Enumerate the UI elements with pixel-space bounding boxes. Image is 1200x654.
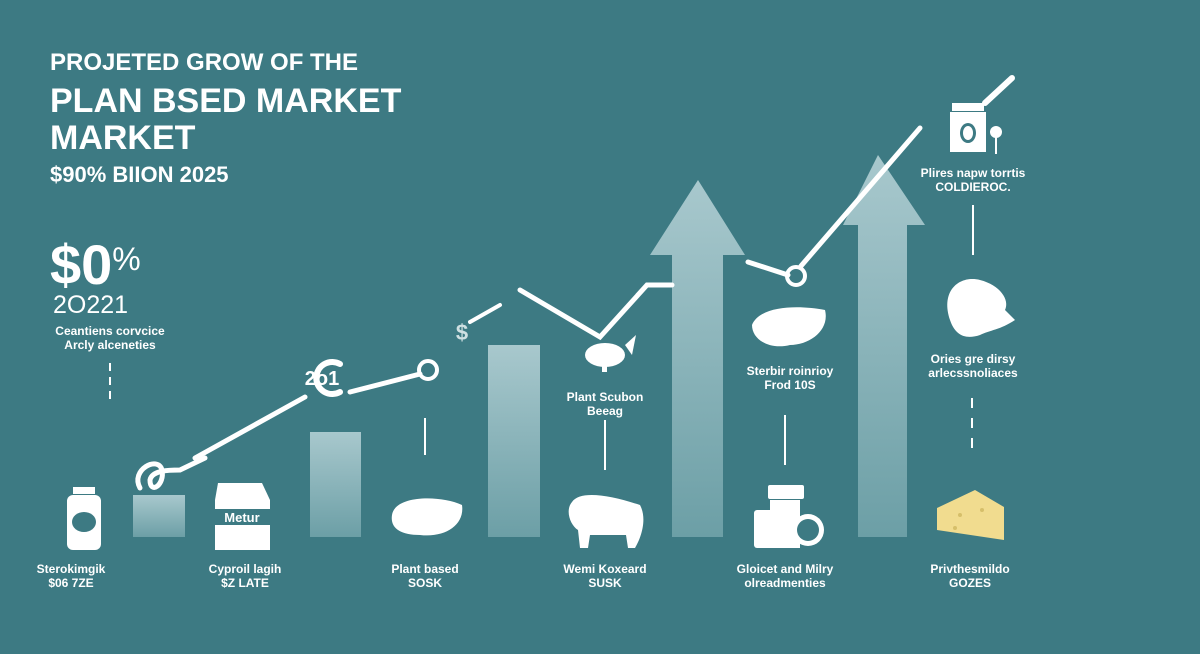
mid labels: Plant Scubon	[567, 390, 643, 404]
bottom icons: Metur	[224, 510, 260, 525]
bottom labels: Gloicet and Milry	[737, 562, 834, 576]
stat 2021: 2O221	[53, 291, 128, 319]
title: MARKET	[50, 119, 196, 157]
bottom icons	[67, 483, 824, 550]
mid labels: Plires napw torrtis	[921, 166, 1026, 180]
bottom labels: SUSK	[588, 576, 622, 590]
mid labels: COLDIEROC.	[935, 180, 1011, 194]
bottom labels: olreadmenties	[744, 576, 826, 590]
stat 2021: $0	[50, 233, 112, 296]
text: 2o1	[305, 368, 339, 390]
icon: bulb	[947, 279, 1015, 337]
title: $90% BIION 2025	[50, 162, 229, 187]
mid labels: arlecssnoliaces	[928, 366, 1018, 380]
mid labels: Ories gre dirsy	[931, 352, 1016, 366]
bottom labels: Cyproil lagih	[209, 562, 281, 576]
bottom labels: $Z LATE	[221, 576, 269, 590]
title: PLAN BSED MARKET	[50, 82, 402, 120]
stat 2021: Ceantiens corvcice	[55, 324, 165, 338]
mid labels: Beeag	[587, 404, 623, 418]
title: PROJETED GROW OF THE	[50, 49, 358, 76]
stat 2021: %	[112, 241, 141, 277]
icon: steak mid	[752, 307, 826, 346]
bottom labels: Sterokimgik	[37, 562, 106, 576]
mid labels: Frod 10S	[764, 378, 816, 392]
bottom labels: GOZES	[949, 576, 991, 590]
bars	[133, 155, 925, 537]
icon: jar top right	[950, 103, 1002, 154]
stat 2021	[50, 233, 165, 352]
stat 2021: Arcly alceneties	[64, 338, 156, 352]
mid labels	[567, 166, 1026, 418]
bottom labels: Wemi Koxeard	[563, 562, 647, 576]
bottom labels: SOSK	[408, 576, 442, 590]
icon: plant beverage	[585, 335, 636, 372]
icon: cheese	[937, 490, 1004, 540]
bottom labels: Plant based	[391, 562, 459, 576]
title	[50, 49, 402, 187]
bottom labels: $06 7ZE	[48, 576, 94, 590]
dashed leaders	[110, 205, 973, 470]
bottom labels	[37, 562, 1010, 590]
mid labels: Sterbir roinrioy	[747, 364, 834, 378]
text: $	[456, 320, 468, 345]
trend line	[138, 78, 1012, 488]
bottom labels: Privthesmildo	[930, 562, 1010, 576]
